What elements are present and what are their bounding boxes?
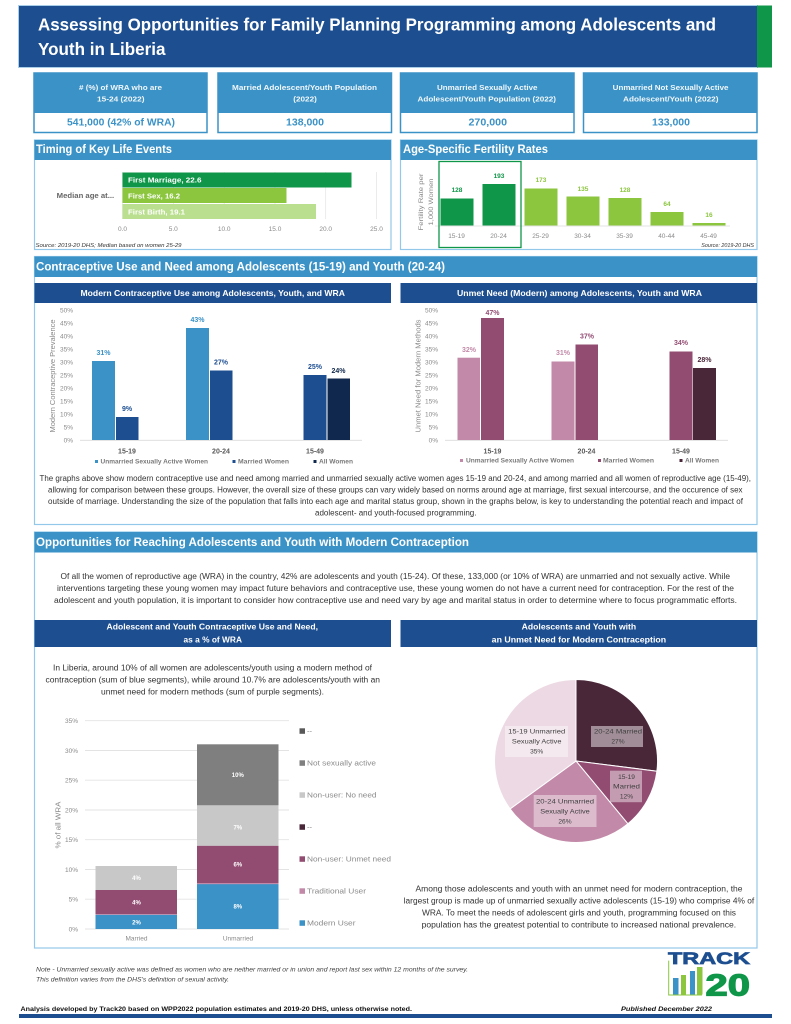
subheading: unmet need: Unmet Need (Modern) among Adolescents, Youth and WRA [457, 288, 702, 298]
panel: age-specific fertility rates [400, 140, 757, 250]
text block: graph explanation: adolescent- and youth-focused programming. [315, 508, 476, 518]
highlight box: ages 15-24 [439, 162, 521, 248]
pie chart: unmet need by group: 26% [558, 818, 572, 826]
panel: timing of key life events: Timing of Key Life Events [36, 142, 172, 156]
subheading: use and need as % of WRA [34, 620, 391, 647]
stat card: married population: (2022) [293, 95, 317, 104]
logo: Track20: TRACK [668, 950, 750, 968]
bar chart: fertility rate by age: 1,000 Women [428, 178, 435, 226]
panel: age-specific fertility rates: Source: 2019-20 DHS [701, 243, 754, 249]
bar chart: unmet need: 10% [425, 412, 438, 418]
bar chart: unmet need: 15-19 [484, 448, 502, 456]
text block: section introduction: interventions targeting these young women may impact future behaviors and contraceptive use, these young women do not have a current need for contraception. For the rest of the [57, 584, 734, 593]
footnote: This definition varies from the DHS's definition of sexual activity. [36, 977, 229, 984]
bar chart: unmet need: 30% [425, 360, 438, 366]
text block: graph explanation: The graphs above show modern contraceptive use and need among married and unmarried sexually active women ages 15-19 and 20-24, and among married and all women of reproductive age (15-49), [40, 474, 751, 483]
stacked bar chart: % of all WRA: Unmarried [223, 936, 254, 942]
bar chart: modern contraceptive use: 15-19 [118, 448, 136, 456]
bar chart: unmet need: 20-24 [578, 448, 596, 456]
legend: Not sexually active [307, 758, 376, 768]
legend: Non-user: Unmet need [307, 854, 391, 864]
pie chart: unmet need by group: 27% [611, 739, 625, 746]
legend: Traditional User [307, 886, 367, 896]
stacked bar chart: % of all WRA: 35% [65, 718, 78, 725]
legend: -- [307, 822, 313, 832]
stacked bar chart: % of all WRA: 25% [65, 778, 78, 785]
stacked bar chart: % of all WRA: 6% [233, 862, 243, 868]
text block: pie chart explanation: Among those adolescents and youth with an unmet need for modern contraception, the [416, 885, 742, 894]
bar chart: fertility rate by age: 128 [620, 187, 631, 194]
pie chart: unmet need by group: 12% [620, 794, 633, 800]
panel: age-specific fertility rates: Age-Specific Fertility Rates [403, 142, 548, 156]
pie chart: unmet need by group: Sexually Active [540, 809, 590, 816]
legend: Married Women [238, 458, 289, 466]
bar chart: unmet need: 25% [425, 372, 438, 380]
legend: Unmarried Sexually Active Women [466, 458, 574, 464]
footnote: Note - Unmarried sexually active was defined as women who are neither married or in union and report last sex within 12 months of the survey. [36, 967, 468, 974]
bar chart: modern contraceptive use: 43% [190, 317, 205, 324]
text block: pie chart explanation: WRA. To meet the needs of adolescent girls and youth, programming focused on this [422, 908, 736, 918]
bar chart: median age at life events: 25.0 [370, 226, 383, 233]
bar chart: median age at life events: First Birth, 19.1 [128, 208, 185, 217]
stat card: unmarried not sexually active: 133,000 [652, 117, 690, 129]
section: opportunities for reaching adolescents and youth [34, 532, 757, 948]
footnote [36, 967, 468, 984]
subheading: unmet need [400, 283, 757, 303]
stacked bar chart: % of all WRA: 10% [232, 773, 244, 779]
pie chart: unmet need by group: Sexually Active [512, 739, 562, 746]
stacked bar chart: % of all WRA: % of all WRA [54, 801, 62, 848]
bar chart: median age at life events: 10.0 [218, 226, 231, 233]
logo: Track20 [668, 950, 750, 1002]
subheading: use and need as % of WRA: Adolescent and Youth Contraceptive Use and Need, [106, 622, 318, 632]
bar chart: unmet need: 50% [425, 308, 438, 314]
bar chart: unmet need [414, 308, 728, 464]
text block: graph explanation [40, 474, 751, 518]
bar chart: median age at life events: 15.0 [269, 226, 282, 233]
legend: -- [307, 726, 313, 736]
bar chart: unmet need: Unmet Need for Modern Methods [414, 319, 422, 432]
bar chart: fertility rate by age: 20-24 [490, 233, 507, 240]
stat card: unmarried sexually active: Unmarried Sexually Active [437, 83, 538, 92]
subheading: unmet need for modern contraception: an Unmet Need for Modern Contraception [492, 634, 666, 644]
bar chart: unmet need: 40% [425, 334, 438, 340]
bar chart: fertility rate by age: 173 [536, 177, 547, 184]
bar chart: unmet need: 37% [580, 334, 595, 340]
pie chart: unmet need by group: 20-24 Married [594, 729, 642, 736]
pie chart: unmet need by group [495, 680, 658, 842]
text block: stacked chart explanation [46, 664, 380, 697]
bar chart: median age at life events: First Marriage, 22.6 [128, 176, 202, 185]
stacked bar chart: % of all WRA: 4% [132, 876, 142, 882]
stat card: WRA 15-24 [34, 73, 207, 132]
bar chart: modern contraceptive use: 10% [60, 412, 73, 418]
text block: pie chart explanation [404, 885, 755, 930]
section: contraceptive use and need [34, 256, 757, 524]
pie chart: unmet need by group: 20-24 Unmarried [536, 798, 594, 806]
footer credit: Analysis developed by Track20 based on WPP2022 population estimates and 2019-20 DHS, unless otherwise noted. [20, 1006, 412, 1013]
bar chart: modern contraceptive use: 15% [60, 398, 73, 406]
text block: graph explanation: outside of marriage. Understanding the size of the population that falls into each age and marital status group, shown in the graphs below, is key to understanding the potential reach and impact of [48, 497, 744, 506]
pie chart: unmet need by group: 15-19 Unmarried [508, 729, 566, 736]
legend: Non-user: No need [307, 790, 376, 800]
section: opportunities for reaching adolescents and youth: Opportunities for Reaching Adolescents and Youth with Modern Contraception [36, 535, 469, 549]
subheading: modern contraceptive use [34, 283, 391, 303]
stacked bar chart: % of all WRA [54, 718, 391, 942]
bar chart: unmet need: 28% [697, 357, 712, 364]
stacked bar chart: % of all WRA: 8% [233, 905, 243, 911]
stat card: WRA 15-24: # (%) of WRA who are [79, 83, 162, 92]
bar chart: modern contraceptive use: 25% [60, 372, 73, 380]
stacked bar chart: % of all WRA: 4% [132, 900, 142, 906]
bar chart: fertility rate by age: 135 [578, 186, 589, 193]
text block: graph explanation: allowing for comparison between these groups. However, the overall size of these groups can vary widely based on norms around age at marriage, first sexual intercourse, and the occurence of sex [48, 486, 743, 494]
panel: timing of key life events [34, 140, 391, 250]
bar chart: unmet need: 5% [429, 424, 438, 432]
stat card: unmarried not sexually active: Adolescent/Youth (2022) [623, 95, 719, 104]
stat card: unmarried sexually active: 270,000 [468, 117, 507, 129]
stat card: unmarried sexually active [400, 73, 574, 132]
bar chart: unmet need: 20% [425, 386, 438, 392]
text block: pie chart explanation: population has the greatest potential to contribute to increased national prevalence. [422, 920, 736, 930]
bar chart: fertility rate by age: 40-44 [658, 233, 675, 240]
subheading: unmet need for modern contraception [400, 620, 757, 647]
text block: pie chart explanation: largest group is made up of unmarried sexually active adolescents (15-19) who comprise 4% of [404, 896, 755, 906]
bar chart: unmet need: 0% [429, 438, 438, 444]
bar chart: modern contraceptive use: 25% [308, 364, 323, 371]
bar chart: median age at life events: 5.0 [169, 226, 178, 233]
stat card: unmarried not sexually active [584, 73, 757, 132]
stacked bar chart: % of all WRA: 0% [69, 926, 78, 934]
title banner: Youth in Liberia [38, 39, 166, 59]
bar chart: modern contraceptive use: 40% [60, 334, 73, 340]
subheading: modern contraceptive use: Modern Contraceptive Use among Adolescents, Youth, and WRA [80, 288, 345, 298]
logo: Track20: 20 [706, 968, 750, 1002]
footer bar [19, 1014, 772, 1018]
bar chart: median age at life events: First Sex, 16.2 [128, 192, 180, 201]
stacked bar chart: % of all WRA: 30% [65, 748, 78, 755]
bar chart: unmet need: 34% [674, 340, 689, 347]
text block: stacked chart explanation: unmet need for modern methods (sum of purple segments). [101, 688, 324, 697]
bar chart: unmet need: 45% [425, 320, 438, 328]
stacked bar chart: % of all WRA: 2% [132, 920, 142, 926]
bar chart: fertility rate by age: 45-49 [700, 233, 717, 240]
text block: section introduction: adolescent and youth population, it is important to consider how contraceptive use and need vary by age and marital status in order to determine where to focus programmatic efforts. [54, 596, 737, 605]
bar chart: modern contraceptive use: 31% [96, 350, 111, 357]
stacked bar chart: % of all WRA: 15% [65, 837, 78, 844]
bar chart: unmet need: 47% [485, 310, 500, 317]
bar chart: modern contraceptive use [48, 308, 362, 466]
legend: All Women [319, 458, 353, 466]
bar chart: unmet need: 15-49 [672, 448, 690, 456]
legend [460, 458, 719, 464]
bar chart: modern contraceptive use: 27% [214, 360, 229, 366]
text block: section introduction: Of all the women of reproductive age (WRA) in the country, 42% are adolescents and youth (15-24). Of these, 133,000 (or 10% of WRA) are unmarried and not sexually active. While [60, 572, 730, 581]
bar chart: fertility rate by age: 64 [663, 201, 671, 208]
bar chart: median age at life events: 0.0 [118, 226, 127, 233]
stat card: married population: Married Adolescent/Youth Population [232, 83, 377, 92]
title banner: Assessing Opportunities for Family Planning Programming among Adolescents and [38, 15, 716, 35]
stat card: WRA 15-24: 541,000 (42% of WRA) [67, 117, 175, 129]
text block: section introduction [54, 572, 737, 605]
bar chart: modern contraceptive use: 5% [64, 424, 73, 432]
bar chart: fertility rate by age: 193 [494, 173, 505, 180]
bar chart: median age at life events: 20.0 [319, 226, 332, 233]
pie chart: unmet need by group: 15-19 [618, 774, 635, 781]
bar chart: fertility rate by age: 15-19 [448, 233, 465, 240]
publication date: Published December 2022 [621, 1006, 712, 1013]
legend [300, 726, 391, 928]
stat card: married population [218, 73, 392, 132]
bar chart: fertility rate by age: Fertility Rate per [418, 173, 425, 230]
bar chart: modern contraceptive use: 45% [60, 320, 73, 328]
stacked bar chart: % of all WRA: 5% [69, 897, 78, 904]
bar chart: modern contraceptive use: 35% [60, 346, 73, 354]
legend: All Women [685, 458, 719, 464]
bar chart: unmet need: 32% [462, 347, 477, 354]
stat card: married population: 138,000 [286, 117, 324, 129]
subheading: unmet need for modern contraception: Adolescents and Youth with [522, 622, 636, 632]
bar chart: median age at life events [57, 172, 383, 233]
subheading: use and need as % of WRA: as a % of WRA [184, 634, 242, 644]
bar chart: modern contraceptive use: 9% [122, 406, 133, 413]
bar chart: median age at life events: Median age at... [57, 191, 114, 200]
bar chart: modern contraceptive use: 50% [60, 308, 73, 314]
bar chart: modern contraceptive use: Modern Contraceptive Prevalence [48, 320, 57, 432]
bar chart: modern contraceptive use: 30% [60, 360, 73, 366]
bar chart: fertility rate by age: 35-39 [616, 233, 633, 240]
bar chart: unmet need: 35% [425, 346, 438, 354]
bar chart: modern contraceptive use: 24% [331, 368, 346, 375]
bar chart: modern contraceptive use: 20-24 [212, 448, 230, 456]
bar chart: fertility rate by age [418, 173, 730, 240]
bar chart: fertility rate by age: 16 [705, 212, 713, 219]
bar chart: modern contraceptive use: 15-49 [306, 448, 324, 456]
pie chart: unmet need by group: 35% [530, 749, 543, 756]
bar chart: fertility rate by age: 128 [452, 187, 463, 194]
legend: Unmarried Sexually Active Women [100, 458, 208, 466]
stacked bar chart: % of all WRA: 10% [65, 867, 78, 874]
text block: stacked chart explanation: In Liberia, around 10% of all women are adolescents/youth using a modern method of [53, 664, 373, 673]
legend: Married Women [603, 458, 654, 464]
stacked bar chart: % of all WRA: Married [125, 936, 148, 942]
section: contraceptive use and need: Contraceptive Use and Need among Adolescents (15-19) and Youth (20-24) [36, 260, 445, 274]
bar chart: modern contraceptive use: 20% [60, 386, 73, 392]
text block: stacked chart explanation: contraception (sum of blue segments), while around 10.7% are adolescents/youth with an [46, 676, 380, 685]
stat card: unmarried sexually active: Adolescent/Youth Population (2022) [418, 95, 557, 104]
stat card: unmarried not sexually active: Unmarried Not Sexually Active [613, 83, 728, 92]
title banner [18, 6, 772, 68]
stacked bar chart: % of all WRA: 7% [233, 826, 243, 832]
panel: timing of key life events: Source: 2019-20 DHS; Median based on women 25-29 [36, 243, 182, 249]
stacked bar chart: % of all WRA: 20% [65, 808, 78, 814]
stat card: WRA 15-24: 15-24 (2022) [97, 95, 145, 104]
pie chart: unmet need by group: Married [613, 784, 640, 791]
legend [95, 458, 353, 466]
legend: Modern User [307, 918, 356, 928]
bar chart: fertility rate by age: 25-29 [532, 233, 549, 240]
bar chart: unmet need: 31% [556, 350, 571, 357]
bar chart: fertility rate by age: 30-34 [574, 233, 591, 240]
bar chart: modern contraceptive use: 0% [64, 438, 73, 444]
bar chart: unmet need: 15% [425, 398, 438, 406]
